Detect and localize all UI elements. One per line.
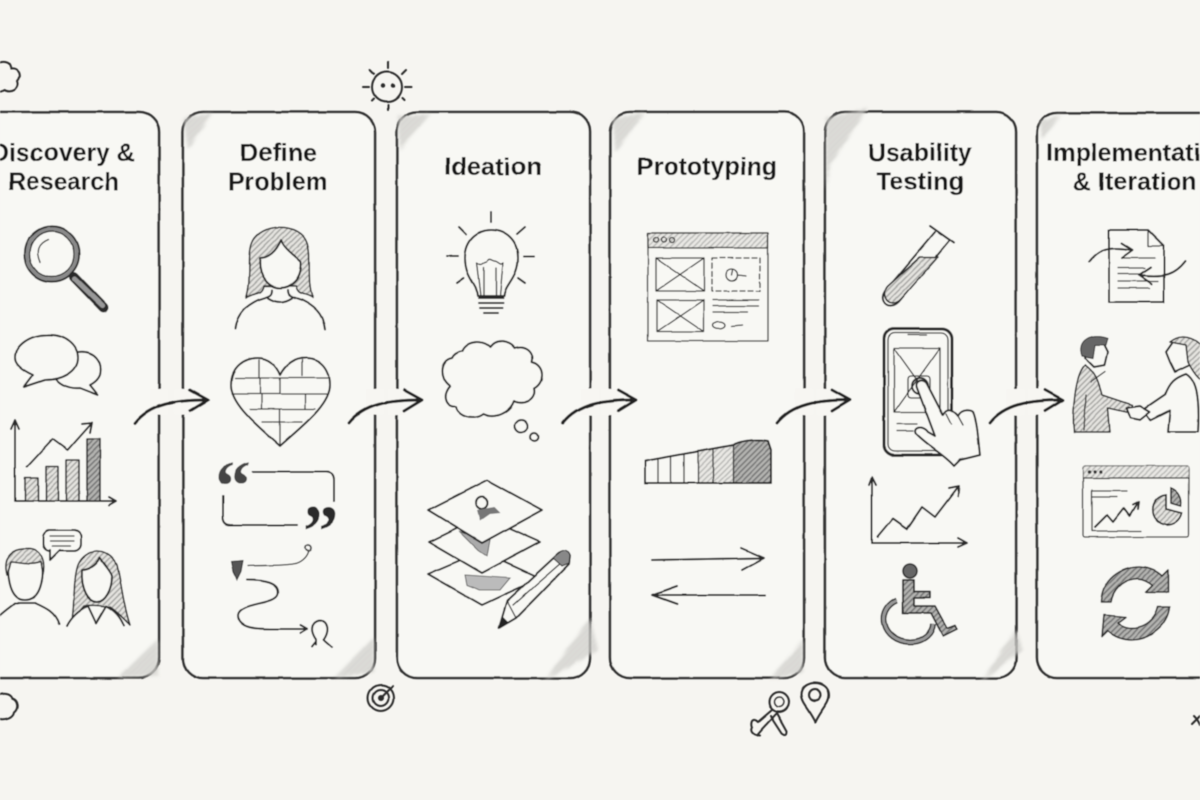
icon: bar chart with trend arrow xyxy=(11,420,116,505)
arrow: discovery to define xyxy=(135,390,208,423)
icon: quote frame: “ xyxy=(215,446,251,526)
icon: line chart xyxy=(869,477,967,547)
heading: usability testing: Testing xyxy=(876,168,964,196)
icon: two people talking xyxy=(0,530,130,626)
icon: analytics dashboard window xyxy=(1083,466,1189,537)
icon: quote frame xyxy=(215,446,339,571)
heading: implementation & iteration xyxy=(1046,139,1200,196)
icon: partial sketch bottom right xyxy=(1192,716,1200,725)
icon: small cloud top left xyxy=(0,62,19,92)
icon: light bulb xyxy=(447,212,534,313)
heading: define problem: Define xyxy=(240,139,317,167)
icon: wrench and screwdriver tools xyxy=(751,692,789,735)
icon: thought cloud xyxy=(442,341,542,441)
arrow: prototyping to usability testing xyxy=(777,390,850,423)
panel: implementation & iteration xyxy=(1028,113,1200,678)
icon: map pin xyxy=(801,683,829,722)
icon: brick heart xyxy=(231,358,330,446)
icon: phone with tapping hand xyxy=(884,329,980,466)
panel: prototyping xyxy=(601,112,813,680)
arrow: usability testing to implementation xyxy=(990,390,1063,423)
icon: speech bubbles xyxy=(15,335,101,395)
arrow: ideation to prototyping xyxy=(563,390,636,423)
heading: usability testing xyxy=(868,139,972,196)
icon: smiling sun xyxy=(363,62,411,110)
panel: usability testing xyxy=(816,108,1025,682)
icon: stacked layers with pencil xyxy=(428,480,570,628)
heading: implementation & iteration: & Iteration xyxy=(1073,168,1197,196)
icon: handshake between two people xyxy=(1073,336,1200,432)
icon: target bullseye xyxy=(368,685,394,711)
icon: magnifying glass xyxy=(24,226,104,308)
arrow: define to ideation xyxy=(349,390,422,423)
icon: woman persona xyxy=(235,227,325,329)
heading: define problem xyxy=(228,139,328,196)
heading: define problem: Problem xyxy=(228,168,328,196)
heading: discovery & research: Research xyxy=(8,168,119,196)
icon: test tube xyxy=(883,226,954,305)
heading: ideation: Ideation xyxy=(444,153,542,181)
heading: usability testing: Usability xyxy=(868,139,972,167)
icon: small cloud bottom left xyxy=(0,693,17,719)
panel: define problem xyxy=(174,112,384,678)
panel: ideation xyxy=(388,112,599,680)
heading: discovery & research xyxy=(0,139,135,196)
icon: wireframe browser xyxy=(648,233,768,341)
panel: discovery & research xyxy=(0,112,168,678)
icon: fidelity ramp bars xyxy=(645,440,771,483)
heading: prototyping: Prototyping xyxy=(637,153,777,181)
icon: two-way iteration arrows xyxy=(652,548,765,604)
icon: user journey path xyxy=(231,545,332,647)
icon: wheelchair accessibility symbol xyxy=(884,564,957,642)
icon: document with exchange arrows xyxy=(1089,230,1185,302)
icon: quote frame: ” xyxy=(303,491,339,571)
icon: refresh cycle arrows xyxy=(1101,567,1170,640)
